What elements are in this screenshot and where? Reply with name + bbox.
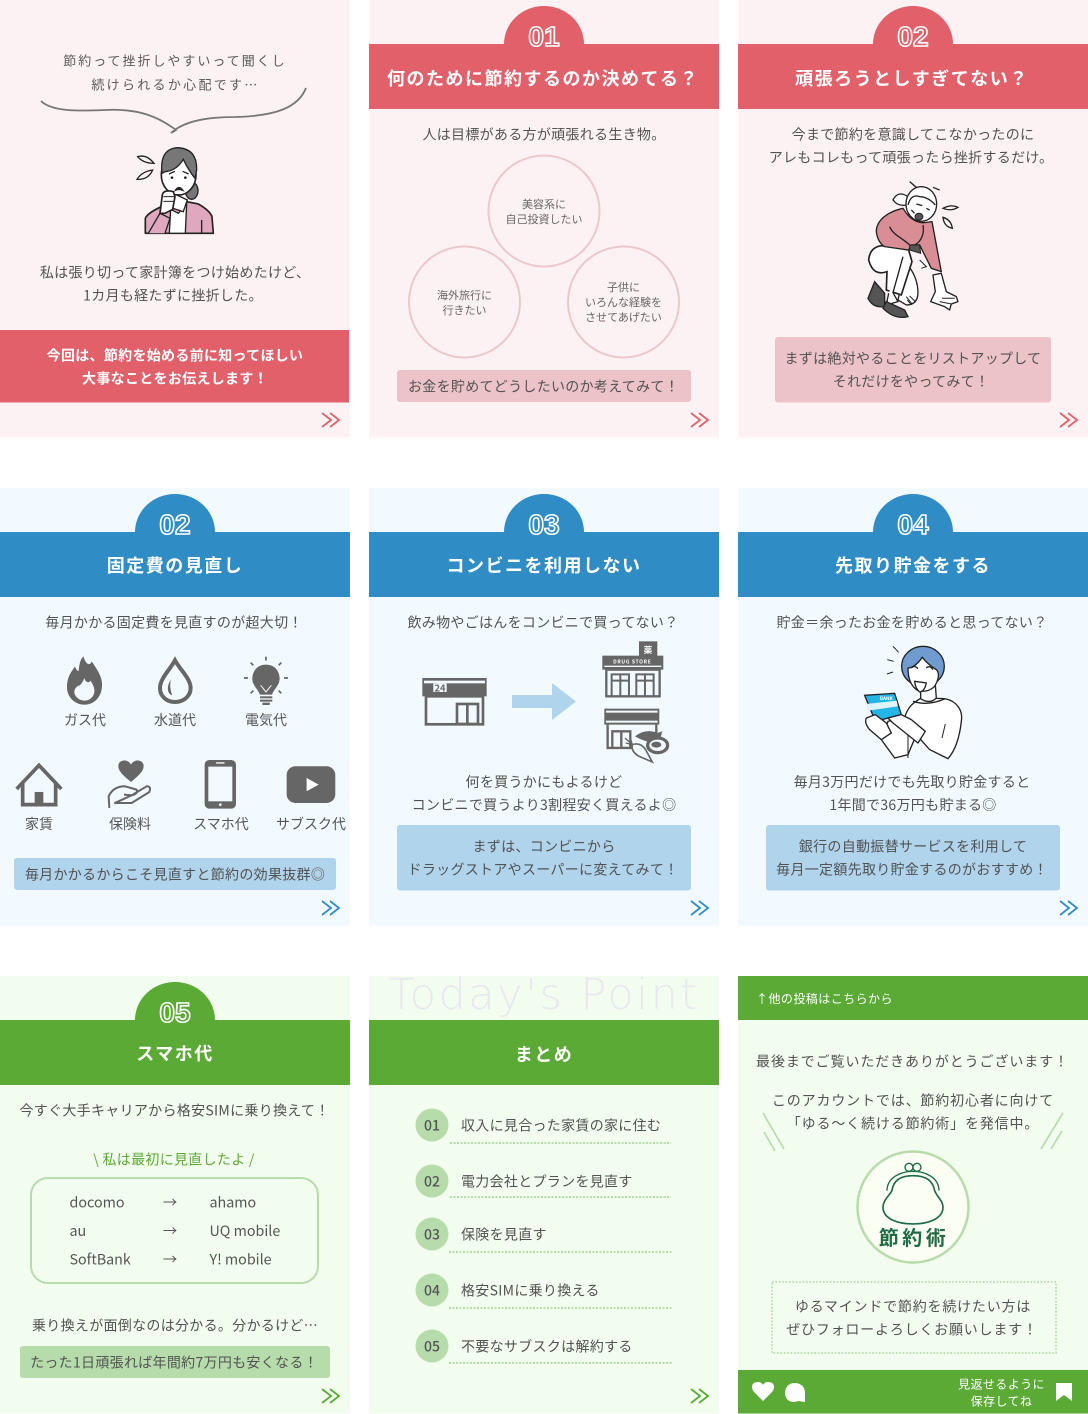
callout — [14, 858, 336, 890]
icon: convenience store — [422, 678, 487, 724]
icon: electricity: 電気代 — [245, 710, 287, 730]
icon: heart — [752, 1382, 774, 1401]
panel: 01 goal — [369, 0, 719, 438]
panel: 02 fixed costs — [0, 488, 350, 926]
item 01 — [416, 1108, 671, 1143]
item 04 — [416, 1274, 672, 1308]
callout — [20, 1346, 330, 1378]
lead text: 貯金＝余ったお金を貯めると思ってない？ — [776, 613, 1048, 633]
callout — [397, 370, 691, 402]
body text — [40, 263, 310, 306]
heading band — [369, 494, 719, 597]
lead text: 毎月かかる固定費を見直すのが超大切！ — [45, 613, 303, 633]
carrier table: SoftBank — [70, 1248, 131, 1270]
save text: 見返せるように — [958, 1376, 1045, 1392]
icon: rent — [17, 765, 61, 834]
panel: 02 try too hard — [738, 0, 1088, 438]
icon: drug store: 薬 — [644, 644, 653, 656]
carrier table: au — [70, 1220, 86, 1241]
speech text: 節約って挫折しやすいって聞くし — [63, 51, 287, 70]
icon: supermarket — [604, 709, 669, 762]
dotted note box: ぜひフォローよろしくお願いします！ — [786, 1320, 1038, 1340]
circle: travel: 海外旅行に — [437, 287, 492, 303]
heading band: コンビニを利用しない — [446, 552, 642, 578]
arrow: next — [1060, 413, 1077, 427]
body text: 私は張り切って家計簿をつけ始めたけど、 — [40, 263, 310, 283]
lead text: 飲み物やごはんをコンビニで買ってない？ — [408, 613, 678, 633]
heading band: 頑張ろうとしすぎてない？ — [795, 65, 1029, 91]
lead text: 今まで節約を意識してこなかったのに — [792, 125, 1034, 145]
icon: exhausted woman — [868, 182, 958, 317]
account text: このアカウントでは、節約初心者に向けて — [772, 1091, 1054, 1111]
icon: woman with bankbook — [865, 646, 962, 759]
thanks text: 最後までご覧いただきありがとうございます！ — [756, 1052, 1069, 1072]
icon: bookmark — [1056, 1383, 1072, 1401]
heading band: 先取り貯金をする — [835, 552, 991, 578]
callout: 毎月一定額先取り貯金するのがおすすめ！ — [776, 860, 1048, 880]
circle: children — [568, 246, 679, 358]
item 02: 電力会社とプランを見直す — [461, 1172, 633, 1192]
heading band: 何のために節約するのか決めてる？ — [387, 65, 699, 91]
circle: children: させてあげたい — [585, 309, 662, 325]
callout: ドラッグストアやスーパーに変えてみて！ — [408, 860, 678, 880]
heading band: 05 — [159, 997, 191, 1028]
panel: 05 smartphone — [0, 976, 350, 1414]
badge: purse: 節約術 — [879, 1222, 949, 1251]
circle: children: いろんな経験を — [585, 294, 662, 310]
circle: travel: 行きたい — [442, 302, 486, 318]
callout band: 大事なことをお伝えします！ — [82, 369, 268, 389]
item 01: 収入に見合った家賃の家に住む — [461, 1116, 661, 1136]
carrier table: → — [163, 1248, 177, 1270]
heading band — [369, 6, 719, 109]
icon: worried woman — [137, 148, 213, 233]
panel: summary — [369, 970, 719, 1414]
body text: 乗り換えが面倒なのは分かる。分かるけど… — [32, 1316, 318, 1336]
item 05: 05 — [424, 1336, 440, 1356]
heading band — [0, 982, 350, 1085]
arrow: next — [322, 413, 339, 427]
item 02 — [416, 1164, 671, 1198]
icon: gas: ガス代 — [64, 710, 106, 730]
circle: beauty: 美容系に — [522, 196, 566, 212]
arrow: next — [691, 413, 708, 427]
callout — [766, 825, 1060, 890]
item 04: 格安SIMに乗り換える — [461, 1281, 600, 1301]
icon: drug store — [602, 641, 663, 696]
arrow: next — [322, 1389, 339, 1403]
carrier table — [31, 1178, 318, 1283]
lead text — [769, 125, 1053, 168]
icon: water — [154, 660, 196, 730]
carrier table: docomo — [70, 1192, 125, 1212]
item 03: 03 — [424, 1224, 440, 1244]
lead text: アレもコレもって頑張ったら挫折するだけ。 — [769, 148, 1053, 168]
heading band: まとめ — [515, 1041, 573, 1067]
save text — [958, 1376, 1045, 1410]
panel: 03 convenience store — [369, 488, 719, 926]
icon: insurance: 保険料 — [109, 814, 151, 834]
item 02: 02 — [424, 1172, 440, 1192]
body text: 1カ月も経たずに挫折した。 — [83, 286, 263, 306]
icon: gas — [64, 656, 106, 730]
panel: intro — [0, 0, 350, 438]
callout: まずは、コンビニから — [472, 837, 616, 857]
icon: subscription: サブスク代 — [276, 814, 346, 834]
item 03: 保険を見直す — [461, 1225, 547, 1245]
body text: 1年間で36万円も貯まる◎ — [829, 795, 997, 815]
icon: subscription — [276, 766, 346, 834]
top band — [738, 976, 1088, 1020]
body text — [794, 772, 1030, 815]
icon: insurance — [109, 760, 151, 834]
item 04: 04 — [424, 1280, 440, 1300]
speech curve — [41, 88, 306, 133]
item 05 — [416, 1330, 672, 1363]
callout — [775, 337, 1051, 402]
lead text: 今すぐ大手キャリアから格安SIMに乗り換えて！ — [19, 1101, 330, 1121]
carrier table: → — [163, 1220, 177, 1241]
account text — [772, 1091, 1054, 1134]
arrow: next — [691, 1389, 708, 1403]
circle: children: 子供に — [607, 279, 640, 295]
callout band: 今回は、節約を始める前に知ってほしい — [47, 346, 303, 366]
heading band — [738, 494, 1088, 597]
heading band: 01 — [528, 21, 560, 52]
item 05: 不要なサブスクは解約する — [461, 1337, 633, 1357]
circle: travel — [409, 246, 520, 358]
icon: convenience store: 24 — [434, 680, 446, 694]
arrow: switch — [512, 683, 576, 720]
body text — [412, 772, 676, 815]
body text: 毎月3万円だけでも先取り貯金すると — [794, 772, 1030, 792]
arrow: next — [1060, 901, 1077, 915]
account text: 「ゆる〜く続ける節約術」を発信中。 — [787, 1114, 1039, 1134]
heading band: 02 — [159, 509, 191, 540]
callout: まずは絶対やることをリストアップして — [785, 349, 1041, 369]
icon: smartphone: スマホ代 — [193, 814, 249, 834]
speech text: 続けられるか心配です… — [91, 75, 260, 94]
heading band: 固定費の見直し — [107, 552, 243, 578]
item 03 — [416, 1218, 672, 1252]
callout: 毎月かかるからこそ見直すと節約の効果抜群◎ — [25, 865, 325, 885]
heading band: スマホ代 — [136, 1040, 214, 1066]
heading band: 02 — [897, 21, 929, 52]
panel: closing — [738, 976, 1088, 1414]
body text: 何を買うかにもよるけど — [466, 772, 622, 792]
callout: お金を貯めてどうしたいのか考えてみて！ — [408, 377, 679, 397]
green note: \ 私は最初に見直したよ / — [93, 1150, 255, 1170]
speech text — [63, 51, 287, 94]
top band: ↑他の投稿はこちらから — [756, 990, 893, 1007]
heading band — [738, 6, 1088, 109]
icon: drug store: DRUG STORE — [613, 659, 651, 666]
heading band — [369, 1020, 719, 1085]
save text: 保存してね — [971, 1392, 1032, 1410]
icon: woman with bankbook: BANK — [880, 696, 894, 702]
callout band — [0, 330, 349, 402]
arrow: next — [322, 901, 339, 915]
icon: water: 水道代 — [154, 710, 196, 730]
callout: それだけをやってみて！ — [833, 372, 989, 392]
carrier table: → — [163, 1192, 177, 1212]
heading band — [0, 494, 350, 597]
icon: smartphone — [193, 760, 249, 834]
carrier table: ahamo — [210, 1192, 256, 1212]
accent lines — [763, 1113, 1063, 1151]
circle: beauty: 自己投資したい — [506, 211, 582, 227]
carrier table: Y! mobile — [208, 1248, 272, 1270]
carrier table: UQ mobile — [210, 1220, 280, 1241]
callout — [397, 825, 691, 890]
icon: electricity — [244, 657, 288, 730]
arrow: next — [691, 901, 708, 915]
badge: purse — [858, 1152, 968, 1262]
lead text: 人は目標がある方が頑張れる生き物。 — [422, 125, 666, 145]
panel: 04 pay yourself first — [738, 488, 1088, 926]
dotted note box — [772, 1282, 1056, 1353]
body text: コンビニで買うより3割程安く買えるよ◎ — [412, 795, 676, 815]
heading band: 04 — [897, 509, 929, 540]
icon: rent: 家賃 — [25, 814, 53, 834]
bottom band — [738, 1370, 1088, 1414]
dotted note box: ゆるマインドで節約を続けたい方は — [795, 1297, 1031, 1317]
callout: 銀行の自動振替サービスを利用して — [799, 837, 1027, 857]
watermark: Today's Point: Today's Point — [388, 970, 700, 1020]
icon: comment — [785, 1383, 805, 1402]
heading band: 03 — [528, 509, 560, 540]
callout: たった1日頑張れば年間約7万円も安くなる！ — [30, 1353, 318, 1373]
circle: beauty — [488, 156, 600, 266]
item 01: 01 — [424, 1116, 440, 1136]
